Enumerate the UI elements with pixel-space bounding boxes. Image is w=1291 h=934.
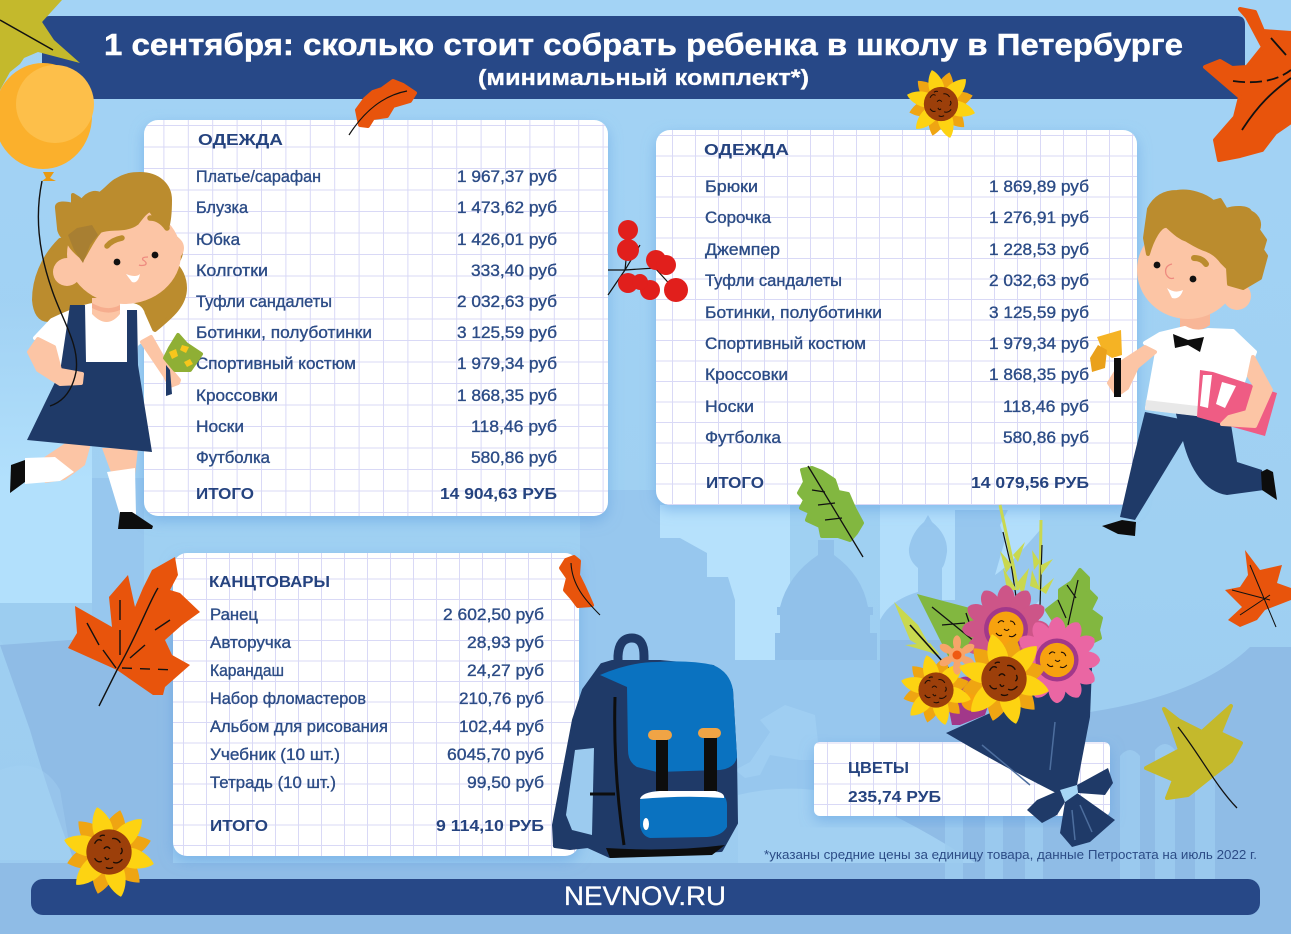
row: sneakers bbox=[196, 387, 557, 405]
row: boots bbox=[196, 324, 557, 342]
row: backpack: Ранец bbox=[210, 606, 259, 624]
rowan berries bbox=[608, 220, 688, 302]
leaf: orange small maple right bbox=[1225, 550, 1291, 627]
row: total bbox=[196, 486, 557, 503]
boy bell bbox=[1090, 330, 1122, 397]
backpack body bbox=[554, 662, 736, 856]
girl small bouquet bbox=[165, 335, 201, 396]
row: trousers: Брюки bbox=[705, 178, 758, 196]
panel: flowers bbox=[814, 742, 1110, 816]
row: textbooks: Учебник (10 шт.) bbox=[210, 746, 340, 764]
title banner bbox=[42, 16, 1245, 99]
sunflower centre bbox=[957, 632, 1051, 726]
row: markers: Набор фломастеров bbox=[210, 690, 366, 708]
row: notebooks: 99,50 руб bbox=[467, 774, 544, 792]
row: sketchbook: Альбом для рисования bbox=[210, 718, 388, 736]
backpack handle bbox=[618, 638, 644, 668]
row: total: ИТОГО bbox=[210, 818, 268, 835]
row: total: ИТОГО bbox=[706, 475, 764, 492]
boy arms bbox=[1109, 347, 1271, 426]
row: shirt: Сорочка bbox=[705, 209, 772, 227]
footnote: *указаны средние цены за единицу товара, данные Петростата на июль 2022 г. bbox=[764, 848, 1257, 862]
bouquet sprigs and leaves bbox=[894, 505, 1101, 672]
row: tracksuit bbox=[196, 355, 557, 373]
sunflower left bbox=[899, 653, 973, 727]
leaf: olive maple right bbox=[1146, 706, 1241, 808]
balloon bbox=[0, 63, 94, 406]
row: sneakers: 1 868,35 руб bbox=[989, 366, 1089, 384]
leaf: orange feather top bbox=[349, 81, 415, 135]
heading: clothing: ОДЕЖДА bbox=[704, 142, 790, 159]
row: socks: 118,46 руб bbox=[1003, 398, 1089, 416]
row: skirt: Юбка bbox=[196, 231, 241, 249]
leaf: green oak bbox=[799, 466, 863, 557]
girl shirt bbox=[35, 304, 151, 366]
purple flower bbox=[948, 677, 990, 725]
row: total bbox=[706, 475, 1089, 492]
boy neck bbox=[1180, 308, 1210, 331]
row: boots: 3 125,59 руб bbox=[989, 304, 1089, 322]
row: jumper: 1 228,53 руб bbox=[989, 241, 1089, 259]
row: notebooks: Тетрадь (10 шт.) bbox=[210, 774, 336, 792]
boy shirt bbox=[1145, 328, 1255, 418]
leaf: olive top left bbox=[0, 0, 80, 90]
character: boy bbox=[1090, 192, 1277, 536]
backpack buckles and straps bbox=[648, 728, 721, 792]
pink daisy right bbox=[1014, 617, 1100, 703]
row: dress: Платье/сарафан bbox=[196, 168, 321, 186]
boy bow tie bbox=[1173, 334, 1204, 352]
row: t-shirt: Футболка bbox=[196, 449, 271, 467]
row: tracksuit: 1 979,34 руб bbox=[989, 335, 1089, 353]
row: total bbox=[210, 818, 544, 835]
row: pen: Авторучка bbox=[210, 634, 292, 652]
row: t-shirt bbox=[705, 429, 1089, 447]
row: pencil bbox=[210, 662, 544, 680]
row: tracksuit bbox=[705, 335, 1089, 353]
row: trousers bbox=[705, 178, 1089, 196]
row: pen bbox=[210, 634, 544, 652]
row: jumper bbox=[705, 241, 1089, 259]
row: t-shirt: 580,86 руб bbox=[1003, 429, 1089, 447]
boy book bbox=[1197, 370, 1277, 436]
row: dress: 1 967,37 руб bbox=[457, 168, 557, 186]
row: sneakers bbox=[705, 366, 1089, 384]
row: textbooks bbox=[210, 746, 544, 764]
row: socks: Носки bbox=[705, 398, 754, 416]
girl back hair bbox=[34, 225, 185, 330]
row: backpack: 2 602,50 руб bbox=[443, 606, 544, 624]
title text: 1 сентября: сколько стоит собрать ребенка в школу в Петербурге bbox=[104, 27, 1183, 62]
row: total: ИТОГО bbox=[196, 486, 254, 503]
row: t-shirt: 580,86 руб bbox=[471, 449, 557, 467]
bouquet bow bbox=[982, 722, 1115, 847]
panel: clothing for boy bbox=[656, 130, 1137, 505]
row: sandals: Туфли сандалеты bbox=[705, 272, 842, 290]
sunflower: top bbox=[905, 68, 977, 140]
leaf: orange small by stationery bbox=[561, 557, 600, 615]
row: skirt bbox=[196, 231, 557, 249]
row: pen: 28,93 руб bbox=[467, 634, 544, 652]
row: boots: Ботинки, полуботинки bbox=[196, 324, 372, 342]
backpack flap bbox=[600, 661, 737, 772]
row: total: 9 114,10 РУБ bbox=[436, 818, 544, 835]
row: socks: Носки bbox=[196, 418, 244, 436]
row: boots bbox=[705, 304, 1089, 322]
row: sandals: Туфли сандалеты bbox=[196, 293, 332, 311]
character: girl bbox=[10, 174, 201, 529]
girl back leg and shoe bbox=[10, 440, 92, 493]
bouquet bbox=[894, 505, 1115, 847]
row: socks bbox=[196, 418, 557, 436]
bottom bar bbox=[31, 879, 1260, 915]
row: dress bbox=[196, 168, 557, 186]
site name: NEVNOV.RU bbox=[564, 881, 726, 911]
row: socks: 118,46 руб bbox=[471, 418, 557, 436]
row: pencil: Карандаш bbox=[210, 662, 284, 680]
row: boots: 3 125,59 руб bbox=[457, 324, 557, 342]
row: tracksuit: 1 979,34 руб bbox=[457, 355, 557, 373]
pink daisy back bbox=[962, 585, 1050, 673]
row: shirt: 1 276,91 руб bbox=[989, 209, 1089, 227]
row: total: 14 904,63 РУБ bbox=[440, 486, 557, 503]
leaf: orange maple left bbox=[68, 557, 200, 706]
row: t-shirt bbox=[196, 449, 557, 467]
row: sandals: 2 032,63 руб bbox=[457, 293, 557, 311]
row: sandals: 2 032,63 руб bbox=[989, 272, 1089, 290]
row: sketchbook: 102,44 руб bbox=[459, 718, 544, 736]
row: jumper: Джемпер bbox=[705, 241, 780, 259]
backpack bbox=[554, 638, 737, 858]
row: t-shirt: Футболка bbox=[705, 429, 782, 447]
row: tracksuit: Спортивный костюм bbox=[196, 355, 356, 373]
row: sandals bbox=[196, 293, 557, 311]
row: blouse: Блузка bbox=[196, 199, 249, 217]
row: boots: Ботинки, полуботинки bbox=[705, 304, 882, 322]
panel: clothing for girl bbox=[144, 120, 608, 516]
row: tights bbox=[196, 262, 557, 280]
girl fringe bbox=[57, 174, 170, 258]
row: sandals bbox=[705, 272, 1089, 290]
leaf: orange maple top right bbox=[1205, 9, 1291, 160]
row: tights: Колготки bbox=[196, 262, 268, 280]
panel: stationery bbox=[173, 553, 579, 856]
row: tracksuit: Спортивный костюм bbox=[705, 335, 866, 353]
row: socks bbox=[705, 398, 1089, 416]
row: sneakers: Кроссовки bbox=[705, 366, 788, 384]
boy legs and shoes bbox=[1102, 410, 1277, 536]
row: pencil: 24,27 руб bbox=[467, 662, 544, 680]
row: sneakers: 1 868,35 руб bbox=[457, 387, 557, 405]
heading: stationery: КАНЦТОВАРЫ bbox=[209, 574, 330, 591]
boy hair bbox=[1145, 192, 1266, 288]
backpack pocket bbox=[640, 791, 727, 838]
boy face bbox=[1137, 221, 1251, 319]
row: backpack bbox=[210, 606, 544, 624]
heading: flowers: ЦВЕТЫ bbox=[848, 760, 909, 777]
girl front leg and shoe bbox=[102, 448, 153, 529]
row: blouse: 1 473,62 руб bbox=[457, 199, 557, 217]
subtitle text: (минимальный комплект*) bbox=[478, 65, 809, 90]
row: blouse bbox=[196, 199, 557, 217]
row: markers bbox=[210, 690, 544, 708]
heading: clothing: ОДЕЖДА bbox=[198, 132, 284, 149]
row: tights: 333,40 руб bbox=[471, 262, 557, 280]
row: textbooks: 6045,70 руб bbox=[447, 746, 544, 764]
row: total: 14 079,56 РУБ bbox=[971, 475, 1089, 492]
row: shirt bbox=[705, 209, 1089, 227]
peach flower bbox=[938, 635, 976, 675]
row: skirt: 1 426,01 руб bbox=[457, 231, 557, 249]
girl face bbox=[53, 204, 184, 322]
row: trousers: 1 869,89 руб bbox=[989, 178, 1089, 196]
girl pinafore bbox=[27, 305, 152, 452]
row: markers: 210,76 руб bbox=[459, 690, 544, 708]
row: notebooks bbox=[210, 774, 544, 792]
row: sketchbook bbox=[210, 718, 544, 736]
sunflower: bottom left bbox=[62, 805, 156, 899]
row: sneakers: Кроссовки bbox=[196, 387, 278, 405]
girl arms bbox=[29, 337, 179, 386]
flowers price: 235,74 РУБ bbox=[848, 789, 941, 806]
bouquet wrapper bbox=[946, 667, 1092, 795]
